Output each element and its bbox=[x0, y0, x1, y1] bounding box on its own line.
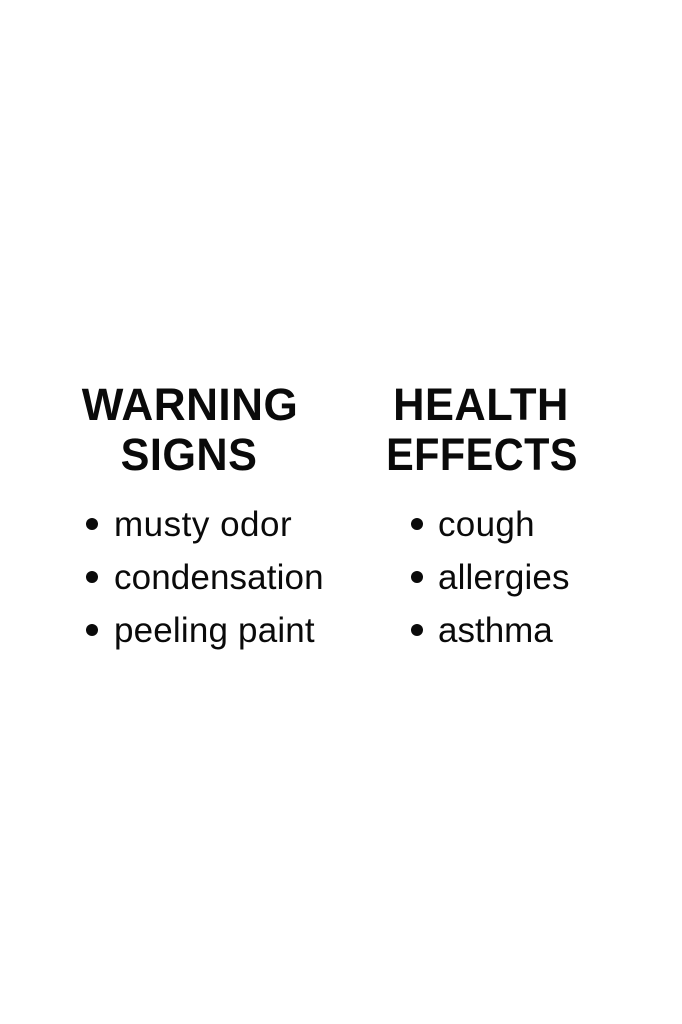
heading: health effects bbox=[386, 379, 578, 480]
list: warning signs: musty odor bbox=[114, 505, 292, 544]
list: warning signs bbox=[86, 505, 324, 650]
list: health effects bbox=[411, 505, 570, 650]
heading: warning signs: WARNING bbox=[82, 379, 298, 430]
heading: health effects: EFFECTS bbox=[386, 429, 578, 480]
heading: health effects: HEALTH bbox=[393, 379, 569, 430]
list: health effects: asthma bbox=[438, 611, 553, 650]
list: health effects: cough bbox=[438, 505, 535, 544]
list: health effects: allergies bbox=[438, 558, 570, 597]
heading: warning signs bbox=[82, 379, 298, 480]
heading: warning signs: SIGNS bbox=[120, 429, 257, 480]
list: warning signs: peeling paint bbox=[114, 611, 315, 650]
list: warning signs: condensation bbox=[114, 558, 324, 597]
